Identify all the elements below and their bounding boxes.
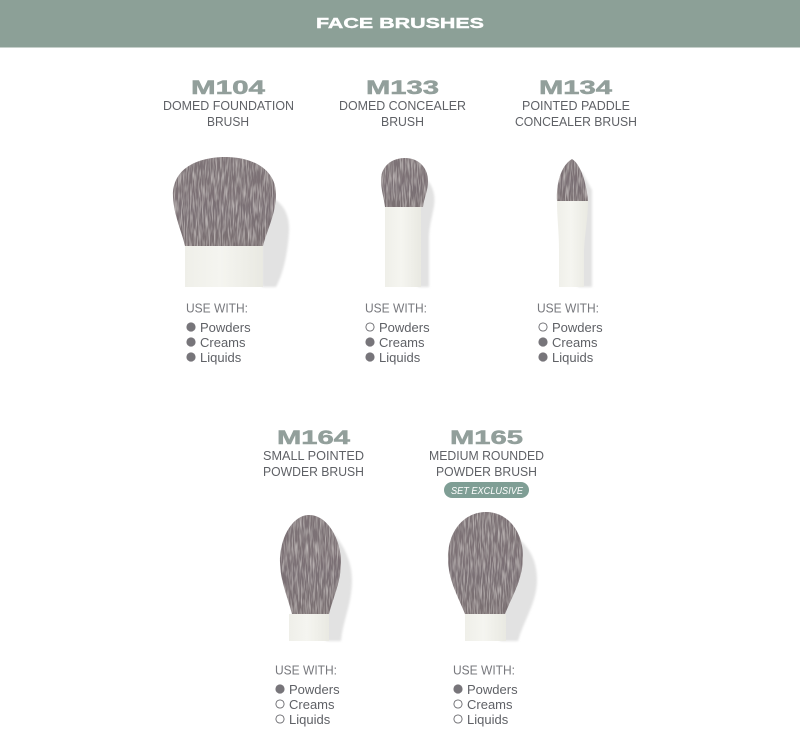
usage list: M133 — [365, 300, 430, 365]
heading: M165: M165 — [450, 427, 523, 449]
brush name: M165 — [429, 448, 544, 479]
usage list: M164: USE WITH: — [275, 662, 337, 678]
panel: M133 — [339, 77, 466, 365]
usage list: M133: Powders — [379, 320, 430, 335]
badge: set exclusive — [444, 482, 529, 498]
usage list: M104: Powders — [200, 320, 251, 335]
usage list: M104: Liquids — [200, 350, 242, 365]
usage list: M134: Liquids — [552, 350, 594, 365]
brush name: M104 — [163, 98, 294, 129]
brush name: M134 — [515, 98, 637, 129]
usage list: M165: USE WITH: — [453, 662, 515, 678]
heading: M104: M104 — [191, 77, 265, 99]
icon: M165 brush — [448, 512, 537, 641]
brush name: M164: SMALL POINTED — [263, 448, 364, 463]
brush name: M133 — [339, 98, 466, 129]
usage list: M134: Creams — [552, 335, 598, 350]
heading: M134: M134 — [539, 77, 612, 99]
brush name: M104: DOMED FOUNDATION — [163, 98, 294, 113]
icon: M134 brush — [557, 159, 592, 287]
usage list: M164: Liquids — [289, 712, 331, 727]
icon: M104 brush — [173, 157, 289, 287]
brush name: M134: POINTED PADDLE — [522, 98, 630, 113]
brush name: M164 — [263, 448, 364, 479]
panel: M165 — [429, 427, 544, 727]
usage list: M104: Creams — [200, 335, 246, 350]
heading: M133: M133 — [366, 77, 439, 99]
usage list: M165: Creams — [467, 697, 513, 712]
usage list: M164: Powders — [289, 682, 340, 697]
brush name: M133: DOMED CONCEALER — [339, 98, 466, 113]
usage list: M133: USE WITH: — [365, 300, 427, 316]
usage list: M164 — [275, 662, 340, 727]
badge: set exclusive: SET EXCLUSIVE — [451, 486, 523, 497]
usage list: M104: USE WITH: — [186, 300, 248, 316]
brush name: M165: MEDIUM ROUNDED — [429, 448, 544, 463]
heading: M164: M164 — [277, 427, 350, 449]
usage list: M133: Creams — [379, 335, 425, 350]
panel: M104 — [163, 77, 294, 365]
usage list: M134: USE WITH: — [537, 300, 599, 316]
usage list: M165: Powders — [467, 682, 518, 697]
usage list: M134: Powders — [552, 320, 603, 335]
panel: M134 — [515, 77, 637, 365]
panel: M164 — [263, 427, 364, 727]
usage list: M165: Liquids — [467, 712, 509, 727]
usage list: M165 — [453, 662, 518, 727]
usage list: M164: Creams — [289, 697, 335, 712]
brush name: M164: POWDER BRUSH — [263, 464, 364, 479]
brush name: M165: POWDER BRUSH — [436, 464, 537, 479]
brush name: M133: BRUSH — [381, 114, 424, 129]
icon: M133 brush — [381, 158, 435, 287]
brush name: M134: CONCEALER BRUSH — [515, 114, 637, 129]
title: FACE BRUSHES — [316, 16, 484, 32]
icon: M164 brush — [280, 515, 352, 641]
usage list: M134 — [537, 300, 603, 365]
header banner — [0, 0, 800, 48]
brush name: M104: BRUSH — [207, 114, 249, 129]
usage list: M104 — [186, 300, 251, 365]
usage list: M133: Liquids — [379, 350, 421, 365]
